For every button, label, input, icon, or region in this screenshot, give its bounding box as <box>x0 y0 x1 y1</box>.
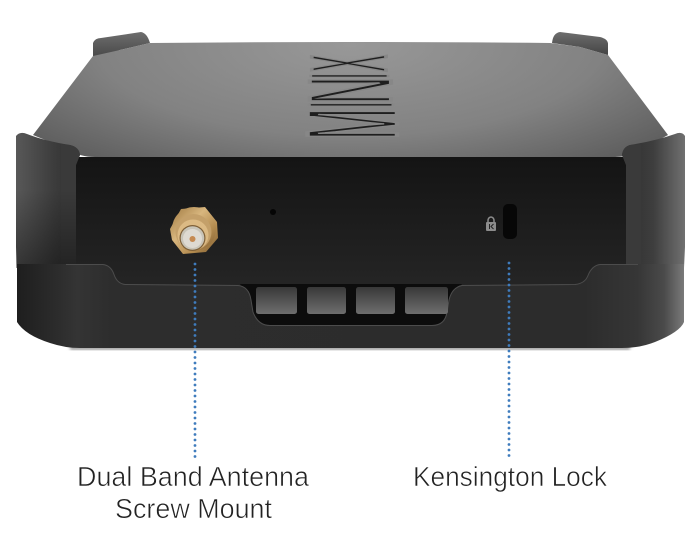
MINIX logo: N <box>284 77 417 104</box>
pinhole <box>270 209 276 215</box>
label: antenna <box>77 461 309 524</box>
leader: antenna <box>194 264 196 458</box>
MINIX logo: I <box>283 102 420 108</box>
buttons <box>256 287 448 314</box>
rear right clip <box>552 32 608 55</box>
MINIX logo: I <box>288 73 413 79</box>
Kensington slot <box>503 204 517 239</box>
MINIX logo <box>280 55 426 139</box>
front face <box>74 157 628 329</box>
rear left clip <box>93 32 150 60</box>
button tray <box>240 284 462 327</box>
left bracket <box>16 133 80 268</box>
right bracket <box>622 133 685 268</box>
dock base <box>17 264 684 348</box>
leader: lock <box>508 263 510 458</box>
top surface <box>33 42 668 157</box>
device: mini PC in dock <box>16 32 685 350</box>
MINIX logo: M <box>280 108 426 139</box>
label: lock: Kensington Lock <box>413 461 608 492</box>
label: antenna: Dual Band Antenna <box>77 461 309 492</box>
icon: padlock <box>486 217 496 231</box>
MINIX logo: X <box>288 55 409 72</box>
ground shadow <box>70 346 630 350</box>
label: antenna: Screw Mount <box>115 493 272 524</box>
icon: antenna connector <box>170 207 218 254</box>
